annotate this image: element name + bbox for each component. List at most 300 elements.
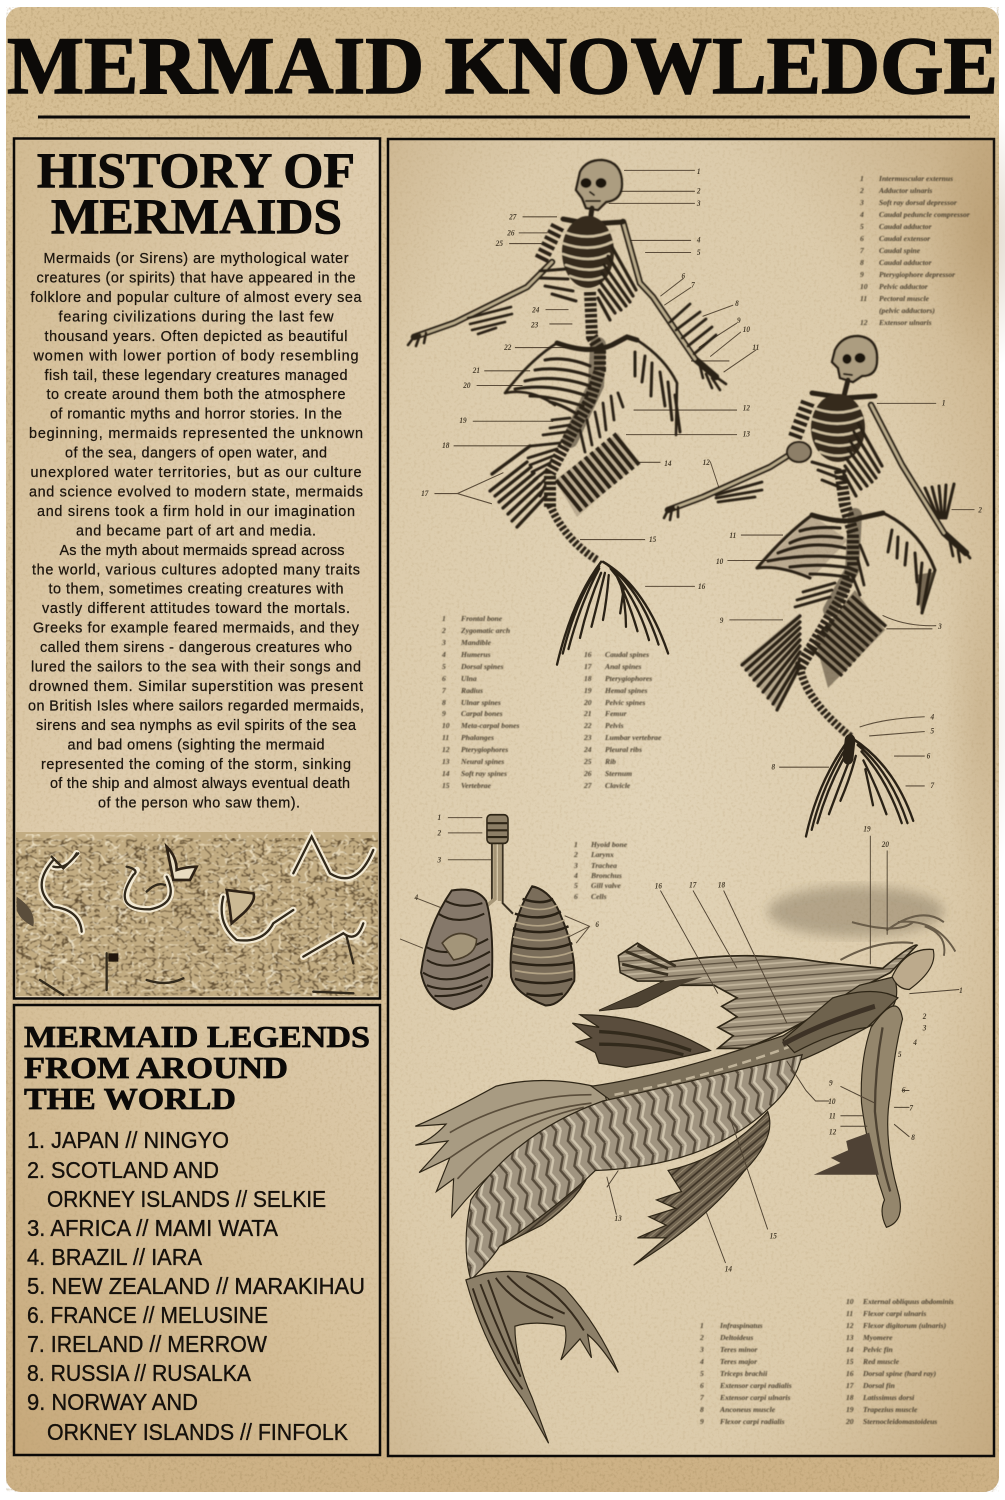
legend: lungs: Hyoid bone [590, 840, 628, 849]
leader lines and numbers: 5 [930, 726, 934, 736]
legend: skeleton bones 16-27: 26 [583, 769, 592, 778]
title: MERMAID KNOWLEDGE [7, 20, 998, 111]
leader lines and numbers: 6 [927, 751, 930, 760]
figure: muscular mermaid: 13 [614, 1214, 622, 1223]
text block: history body: and sirens took a firm hold in our imagination [37, 504, 355, 520]
tail flukes [806, 738, 913, 836]
legend: skeleton bones 16-27: Femur [605, 709, 628, 718]
legend: skeleton bones 16-27: Rib [604, 757, 616, 766]
text block: history body: As the myth about mermaids spread across [60, 543, 344, 559]
bones [408, 160, 726, 560]
legend: skeleton bones 1-15: 3 [441, 638, 446, 647]
leader lines and numbers: 7 [691, 280, 696, 289]
legend: top right muscles: 6 [860, 234, 864, 243]
illustration: sea serpents engraving [16, 832, 378, 996]
tail flukes [557, 562, 668, 665]
raised arm and fin [599, 943, 917, 1048]
legend: top right muscles: Caudal adductor [879, 258, 933, 267]
spine [800, 470, 853, 667]
leader lines and numbers: 12 [703, 457, 710, 467]
leader lines and numbers: 22 [503, 342, 511, 352]
legend: skeleton bones 1-15: Vertebrae [461, 781, 492, 790]
legend: skeleton bones 1-15: Dorsal spines [460, 662, 503, 671]
leader lines and numbers: 5 [697, 248, 701, 257]
figure: muscular mermaid: 12 [829, 1127, 836, 1137]
legend: muscles 10-20: 13 [846, 1333, 854, 1342]
legend: skeleton bones 1-15: Humerus [460, 650, 491, 659]
arms [414, 262, 552, 337]
text block: history body [28, 251, 364, 812]
figure: muscular mermaid: 20 [881, 840, 889, 849]
bones [664, 336, 970, 738]
legend: muscles 1-9: 7 [700, 1393, 705, 1402]
list: legends by country: 3. AFRICA // MAMI WATA [27, 1215, 279, 1241]
lower left fin [492, 1164, 593, 1246]
heading: history of mermaids: HISTORY OF [37, 142, 355, 198]
legend: muscles 10-20: Dorsal spine (hard ray) [862, 1369, 937, 1378]
scaled body [466, 1055, 802, 1280]
leader lines and numbers: 16 [698, 582, 705, 591]
figure: muscular mermaid: 14 [725, 1264, 732, 1274]
leader lines and numbers: 15 [649, 534, 656, 544]
leader lines and numbers: 1 [942, 398, 946, 408]
legend: skeleton bones 16-27: 25 [583, 757, 592, 766]
text block: history body: of the sea, dangers of open water, and [65, 446, 327, 462]
text block: history body: beginning, mermaids represented the unknown [29, 426, 363, 442]
text block: history body: Greeks for example feared mermaids, and they [33, 621, 360, 637]
legend: skeleton bones 1-15: 13 [442, 757, 450, 766]
mid ribs [795, 545, 868, 607]
legend: skeleton bones 1-15: 6 [442, 674, 446, 683]
hair [840, 915, 955, 960]
legend: top right muscles: Caudal adductor [879, 222, 933, 231]
legend: lungs: 2 [573, 850, 578, 859]
right hanging fin [637, 340, 677, 435]
figure: muscular mermaid: 4 [912, 1038, 917, 1047]
legend: skeleton bones 16-27: Pelvis [605, 721, 624, 730]
leader lines [607, 836, 959, 1263]
legend: muscles 1-9: 1 [700, 1321, 704, 1330]
legend: muscles 1-9: Extensor carpi radialis [719, 1381, 792, 1390]
legend: muscles 10-20 [845, 1297, 954, 1426]
legend: muscles 10-20: 18 [846, 1393, 854, 1402]
leader lines and numbers: 3 [937, 621, 942, 631]
legend: muscles 1-9: 8 [700, 1405, 704, 1414]
legend: skeleton bones 1-15: Ulna [461, 674, 477, 683]
figure: muscular mermaid [415, 824, 963, 1443]
legend: lungs: Bronchus [590, 871, 622, 880]
text block: history body: represented the coming of the storm, sinking [41, 757, 351, 773]
text block: history body: the world, various cultures adopted many traits [32, 562, 360, 578]
text block: history body: creatures (or spirits) that have appeared in the [36, 270, 356, 286]
figure: lungs: 1 [438, 813, 441, 822]
legend: top right muscles: 9 [860, 270, 864, 279]
tail fin [466, 1271, 618, 1443]
list: legends by country: 4. BRAZIL // IARA [27, 1244, 203, 1270]
legend: skeleton bones 1-15: 7 [442, 686, 447, 695]
legend: skeleton bones 1-15: 8 [442, 698, 446, 707]
figure: muscular mermaid: 6 [902, 1085, 906, 1095]
figure: muscular mermaid: 8 [911, 1133, 915, 1142]
text block: history body: of romantic myths and horror stories. In the [50, 407, 342, 423]
legend: muscles 1-9: Triceps brachii [720, 1369, 768, 1378]
legend: skeleton bones 1-15: Neural spines [460, 757, 504, 766]
figure: muscular mermaid: 19 [863, 824, 871, 834]
title rule [38, 116, 970, 118]
legend: skeleton bones 1-15: Meta-carpal bones [460, 721, 519, 730]
leader lines and numbers: 11 [729, 531, 736, 540]
list: legends by country: 1. JAPAN // NINGYO [27, 1127, 229, 1153]
legend: muscles 1-9: Flexor carpi radialis [720, 1417, 785, 1426]
legend: top right muscles: 3 [859, 198, 864, 207]
figure: lungs: 4 [414, 893, 418, 902]
list: legends by country: 2. SCOTLAND AND [27, 1157, 219, 1183]
legend: top right muscles: 1 [860, 174, 864, 183]
legend: muscles 1-9: 9 [700, 1417, 704, 1426]
legend: lungs: Cells [591, 892, 607, 901]
legend: skeleton bones 1-15: 10 [442, 721, 450, 730]
legend: skeleton bones 16-27: Pleural ribs [605, 745, 642, 754]
legend: top right muscles: 8 [860, 258, 864, 267]
legend: skeleton bones 1-15: 11 [442, 733, 449, 742]
leader lines and numbers: 7 [930, 781, 935, 790]
legend: skeleton bones 1-15: Phalanges [461, 733, 494, 742]
leader lines and numbers: 4 [696, 235, 701, 245]
heading: mermaid legends: THE WORLD [24, 1081, 236, 1116]
legend: muscles 10-20: 14 [846, 1345, 854, 1354]
legend: muscles 10-20: Latissimus dorsi [862, 1393, 915, 1402]
list: legends by country: ORKNEY ISLANDS // FINFOLK [47, 1419, 349, 1445]
figure: muscular mermaid: 18 [718, 880, 725, 890]
heading: mermaid legends [24, 1019, 370, 1116]
figure: muscular mermaid: 2 [922, 1012, 927, 1021]
legend: muscles 10-20: Dorsal fin [862, 1381, 895, 1390]
legend: skeleton bones 16-27: Anal spines [604, 662, 642, 671]
text block: history body: thousand years. Often depicted as beautiful [44, 329, 348, 345]
leader lines and numbers: 8 [735, 299, 739, 308]
spine [550, 292, 600, 507]
legend: top right muscles: Adductor ulnaris [878, 186, 932, 195]
legend: skeleton bones 1-15: 5 [442, 662, 446, 671]
left lung [421, 890, 492, 1009]
legend: top right muscles: 5 [860, 222, 864, 231]
legend: skeleton bones 1-15: 1 [442, 614, 446, 623]
text block: history body: Mermaids (or Sirens) are mythological water [44, 251, 349, 267]
legend: muscles 10-20: Flexor digitorum (ulnaris) [863, 1321, 947, 1330]
leader lines and numbers: 13 [743, 429, 750, 439]
text block: history body: called them sirens - dangerous creatures who [40, 640, 352, 656]
text block: history body: of the person who saw them). [98, 796, 300, 812]
legend: muscles 10-20: 20 [845, 1417, 854, 1426]
leader lines and numbers: 26 [506, 228, 515, 238]
lowered arm [861, 1006, 902, 1227]
legend: skeleton bones 1-15 [441, 614, 519, 790]
leader lines and numbers: 6 [682, 271, 685, 281]
legend: muscles 1-9: Extensor carpi ulnaris [719, 1393, 791, 1402]
leader lines and numbers: 10 [743, 324, 750, 334]
legend: lungs: Larynx [590, 850, 614, 859]
legend: skeleton bones 1-15: Soft ray spines [461, 769, 507, 778]
skull [576, 160, 622, 210]
legend: muscles 10-20: 17 [846, 1381, 855, 1390]
left fin [528, 443, 560, 496]
figure: muscular mermaid: 17 [689, 880, 698, 890]
legend: muscles 10-20: 11 [846, 1309, 853, 1318]
leader lines and numbers: 20 [462, 381, 471, 390]
ribbed block [815, 590, 885, 688]
leader lines and numbers: 10 [716, 557, 723, 566]
legend: skeleton bones 16-27: 22 [583, 721, 592, 730]
text block: history body: and bad omens (sighting the mermaid [68, 737, 324, 753]
right lung [511, 886, 574, 1005]
legend: top right muscles: 4 [859, 210, 864, 219]
leader lines and numbers [421, 166, 759, 591]
legend: muscles 10-20: Sternocleidomastoideus [863, 1417, 937, 1426]
legend: skeleton bones 1-15: Ulnar spines [461, 698, 501, 707]
legend: lungs: 3 [573, 861, 578, 870]
back ridge [592, 977, 897, 1103]
legend: skeleton bones 16-27: 27 [583, 781, 593, 790]
leader lines and numbers: 2 [977, 505, 982, 515]
legend: muscles 10-20: 10 [846, 1297, 854, 1306]
legend: skeleton bones 1-15: 12 [442, 745, 450, 754]
legend: skeleton bones 16-27 [583, 650, 662, 790]
head [892, 949, 934, 989]
figure: muscular mermaid: 3 [922, 1023, 927, 1033]
heading: mermaid legends: FROM AROUND [24, 1050, 288, 1085]
legend: skeleton bones 16-27: 23 [583, 733, 592, 742]
figure: skeleton mermaid one [408, 160, 759, 665]
right fin [883, 513, 935, 613]
legend: top right muscles: Pterygiophore depressor [879, 270, 956, 279]
text block: history body: lured the sailors to the sea with their songs and [31, 660, 361, 676]
text block: history body: to them, sometimes creating creatures with [48, 582, 344, 598]
leader lines and numbers: 24 [531, 305, 539, 314]
legend: lungs: 5 [574, 881, 578, 890]
legend: skeleton bones 1-15: 15 [442, 781, 450, 790]
figure: muscular mermaid: 7 [909, 1103, 914, 1113]
legend: muscles 10-20: Flexor carpi ulnaris [863, 1309, 926, 1318]
legend: top right muscles: Intermuscular externus [878, 174, 953, 183]
legend: muscles 10-20: Red muscle [862, 1357, 900, 1366]
legend: muscles 1-9: Infraspinatus [719, 1321, 763, 1330]
legend: lungs: 1 [574, 840, 578, 849]
legend: muscles 10-20: External obliquus abdominis [862, 1297, 954, 1306]
legend: lungs: 6 [574, 892, 578, 901]
heading: mermaid legends: MERMAID LEGENDS [24, 1019, 370, 1054]
leader lines and numbers: 2 [696, 186, 701, 196]
legend: muscles 1-9: Deltoideus [719, 1333, 753, 1342]
leader lines and numbers: 12 [743, 403, 750, 413]
ribbed block [555, 433, 638, 517]
legend: muscles 1-9: 4 [699, 1357, 704, 1366]
legend: muscles 10-20: 12 [846, 1321, 854, 1330]
figure: muscular mermaid: 5 [898, 1049, 902, 1059]
legend: skeleton bones 1-15: 4 [441, 650, 446, 659]
rib cage [563, 219, 623, 224]
text block: history body: and science evolved to modern state, mermaids [29, 484, 363, 500]
dorsal fin [572, 1015, 710, 1067]
legend: muscles 10-20: Myomere [862, 1333, 893, 1342]
legend: top right muscles: Pectoral muscle [879, 294, 930, 303]
hand fin [814, 1133, 879, 1175]
legend: skeleton bones 1-15: Frontal bone [461, 614, 503, 623]
legend: skeleton bones 16-27: 24 [583, 745, 592, 754]
legend: skeleton bones 16-27: 16 [584, 650, 592, 659]
legend: skeleton bones 16-27: 21 [583, 709, 592, 718]
legend: muscles 1-9: Anconeus muscle [719, 1405, 776, 1414]
legend: skeleton bones 16-27: 19 [584, 686, 592, 695]
legend: muscles 1-9: 3 [699, 1345, 704, 1354]
upper tail streamer [415, 1080, 607, 1217]
panel: mermaid legends [14, 1005, 380, 1455]
legend: top right muscles: 2 [859, 186, 864, 195]
rib cage [812, 393, 875, 398]
leader lines and numbers: 8 [772, 762, 775, 772]
panel: history of mermaids [14, 138, 380, 998]
text block: history body: on British Isles where sailors regarded mermaids, [28, 698, 364, 714]
leader lines and numbers: 21 [472, 366, 480, 375]
legend: skeleton bones 16-27: Sternum [605, 769, 632, 778]
text block: history body: unexplored water territories, but as our culture [30, 465, 362, 481]
leader lines and numbers: 9 [720, 615, 723, 625]
leader lines and numbers: 17 [421, 489, 429, 498]
legend: top right muscles: Caudal extensor [879, 234, 931, 243]
leader lines and numbers: 9 [737, 316, 741, 325]
legend: top right muscles: Pelvic adductor [879, 282, 929, 291]
legend: lungs: 4 [573, 871, 578, 880]
figure: muscular mermaid: 10 [828, 1097, 836, 1106]
legend: muscles 1-9: Teres major [720, 1357, 758, 1366]
leader lines and numbers: 11 [752, 342, 759, 352]
legend: top right muscles [859, 174, 971, 327]
leader lines and numbers [703, 398, 982, 790]
legend: top right muscles: 12 [860, 318, 868, 327]
text block: history body: fish tail, these legendary creatures managed [44, 368, 348, 384]
legend: skeleton bones 1-15: Zygomatic arch [460, 626, 510, 635]
text block: history body: and became part of art and media. [76, 523, 316, 539]
skull [832, 336, 877, 382]
text block: history body: women with lower portion of body resembling [32, 348, 358, 364]
figure: muscular mermaid: 16 [655, 881, 662, 891]
figure: lungs: 2 [437, 828, 441, 837]
figure: skeleton mermaid two [664, 336, 982, 836]
text block: history body: drowned them. Similar superstition was present [29, 679, 363, 695]
list: legends by country: ORKNEY ISLANDS // SELKIE [47, 1186, 326, 1212]
text block: history body: folklore and popular culture of almost every sea [30, 290, 362, 306]
legend: skeleton bones 16-27: 17 [584, 662, 593, 671]
hair cloud [768, 886, 944, 937]
legend: skeleton bones 16-27: Hemal spines [604, 686, 647, 695]
legend: muscles 1-9: Teres minor [720, 1345, 759, 1354]
legend: skeleton bones 16-27: 18 [584, 674, 592, 683]
legend: muscles 10-20: 19 [846, 1405, 854, 1414]
leader lines and numbers: 1 [697, 166, 701, 176]
legend: skeleton bones 1-15: 9 [442, 709, 446, 718]
lower ventral fin [634, 1112, 770, 1265]
legend: muscles 10-20: Trapezius muscle [863, 1405, 918, 1414]
legend: muscles 1-9: 5 [700, 1369, 704, 1378]
leader lines and numbers: 23 [530, 320, 538, 330]
leader lines and numbers: 14 [664, 458, 672, 468]
legend: muscles 1-9: 6 [700, 1381, 704, 1390]
legend: skeleton bones 16-27: Caudal spines [605, 650, 649, 659]
figure: lungs: 6 [595, 920, 599, 929]
legend: muscles 1-9: 2 [699, 1333, 704, 1342]
figure: muscular mermaid: 9 [829, 1078, 833, 1088]
legend: top right muscles: Soft ray dorsal depressor [879, 198, 958, 207]
legend: skeleton bones 16-27: Pelvic spines [605, 698, 645, 707]
legend: lungs: Gill valve [591, 881, 621, 890]
arms [668, 450, 797, 510]
legend: skeleton bones 1-15: 14 [442, 769, 450, 778]
text block: history body: to create around them both the atmosphere [46, 387, 346, 403]
legend: top right muscles: Caudal spine [879, 246, 921, 255]
legend: top right muscles: (pelvic adductors) [879, 306, 935, 315]
leader lines and numbers: 4 [930, 712, 934, 722]
list: legends by country: 5. NEW ZEALAND // MARAKIHAU [27, 1273, 365, 1299]
leader lines and numbers: 19 [459, 416, 467, 425]
legend: skeleton bones 1-15: Mandible [460, 638, 492, 647]
legend: top right muscles: 7 [860, 246, 865, 255]
figure: muscular mermaid: 15 [770, 1231, 777, 1241]
list: legends by country: 9. NORWAY AND [27, 1389, 198, 1415]
legend: muscles 1-9 [699, 1321, 792, 1426]
figure: muscular mermaid: 1 [959, 985, 963, 995]
legend: skeleton bones 16-27: Pterygiophores [605, 674, 652, 683]
legend: top right muscles: 10 [860, 282, 868, 291]
legend: muscles 10-20: Pelvic fin [863, 1345, 893, 1354]
text block: history body: vastly different attitudes toward the mortals. [42, 601, 350, 617]
legend: skeleton bones 1-15: Pterygiophores [461, 745, 508, 754]
figure: muscular mermaid: 11 [829, 1111, 836, 1121]
figure: lungs [400, 813, 599, 1009]
torso [783, 992, 898, 1053]
legend: skeleton bones 16-27: 20 [583, 698, 592, 707]
legend: skeleton bones 1-15: Radius [460, 686, 483, 695]
legend: skeleton bones 16-27: Lumbar vertebrae [604, 733, 662, 742]
text block: history body: of the ship and almost always eventual death [50, 776, 350, 792]
figure: lungs: 3 [437, 855, 441, 864]
pelvis and left fin [757, 515, 848, 578]
heading: history of mermaids [37, 142, 355, 244]
legend: skeleton bones 1-15: 2 [441, 626, 446, 635]
legend: skeleton bones 1-15: Carpal bones [461, 709, 503, 718]
legend: top right muscles: Caudal peduncle compressor [879, 210, 971, 219]
legend: muscles 10-20: 16 [846, 1369, 854, 1378]
list: legends by country: 6. FRANCE // MELUSINE [27, 1302, 268, 1328]
list: legends by country: 8. RUSSIA // RUSALKA [27, 1360, 252, 1386]
leader lines and numbers: 27 [508, 212, 517, 222]
leader lines and numbers: 3 [696, 199, 701, 208]
heading: history of mermaids: MERMAIDS [51, 188, 342, 244]
legend: top right muscles: Extensor ulnaris [878, 318, 932, 327]
left fin block [740, 613, 800, 710]
text block: history body: sirens and sea nymphs as evil spirits of the sea [36, 718, 356, 734]
mid ribs [543, 393, 623, 452]
list: legends by country: 7. IRELAND // MERROW [27, 1331, 267, 1357]
legend: top right muscles: 11 [860, 294, 867, 303]
list: legends by country [27, 1127, 365, 1445]
legend: lungs: Trachea [591, 861, 617, 870]
leader lines and numbers: 25 [495, 239, 503, 248]
panel: anatomy diagrams [388, 110, 1005, 1456]
leader lines and numbers: 18 [442, 441, 449, 450]
text block: history body: fearing civilizations during the last few [58, 309, 334, 325]
legend: skeleton bones 16-27: Clavicle [605, 781, 631, 790]
pelvis and upper left fin [505, 343, 557, 405]
legend: muscles 10-20: 15 [846, 1357, 854, 1366]
